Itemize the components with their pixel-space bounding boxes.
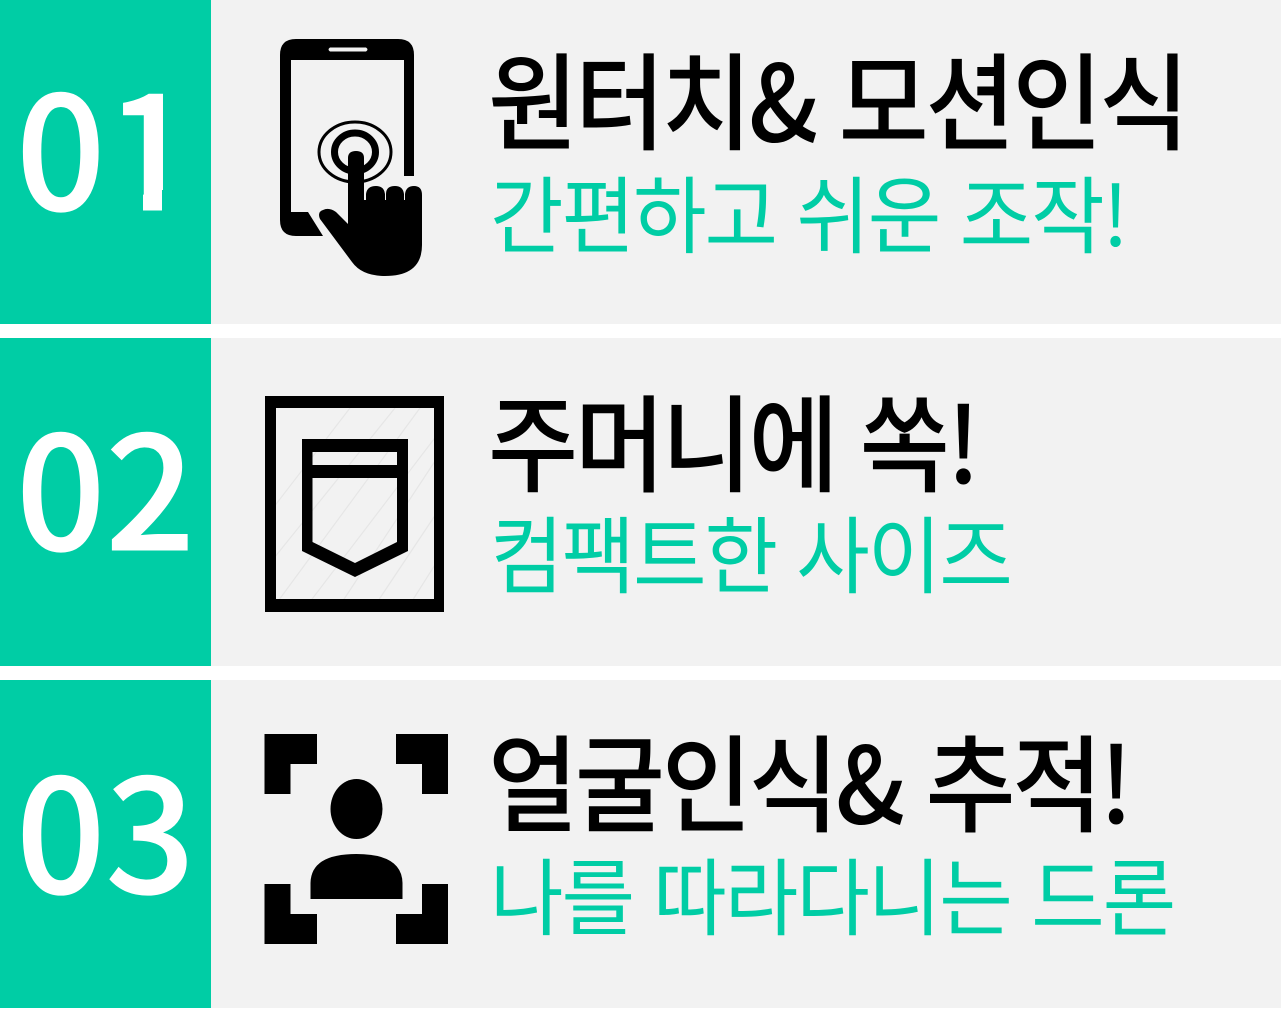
number block 01 xyxy=(0,0,211,324)
panel: 02 pocket size xyxy=(0,338,1281,666)
number block 01: 01 xyxy=(16,29,195,256)
icon: face recognition frame xyxy=(264,734,448,944)
icon: phone with touching hand xyxy=(280,39,422,276)
title: 원터치& 모션인식 xyxy=(488,19,1186,173)
title: 얼굴인식& 추적! xyxy=(488,701,1130,854)
subtitle: 컴팩트한 사이즈 xyxy=(490,490,1011,611)
icon: pocket xyxy=(265,396,444,612)
number block 03: 03 xyxy=(16,712,195,939)
title: 주머니에 쏙! xyxy=(488,361,977,514)
number block 03 xyxy=(0,680,211,1008)
subtitle: 나를 따라다니는 드론 xyxy=(490,832,1174,954)
number block 02 xyxy=(0,338,211,666)
panel: 01 one-touch and motion recognition xyxy=(0,0,1281,324)
number block 02: 02 xyxy=(16,369,195,596)
subtitle: 간편하고 쉬운 조작! xyxy=(490,150,1126,272)
panel: 03 face recognition and tracking xyxy=(0,680,1281,1008)
